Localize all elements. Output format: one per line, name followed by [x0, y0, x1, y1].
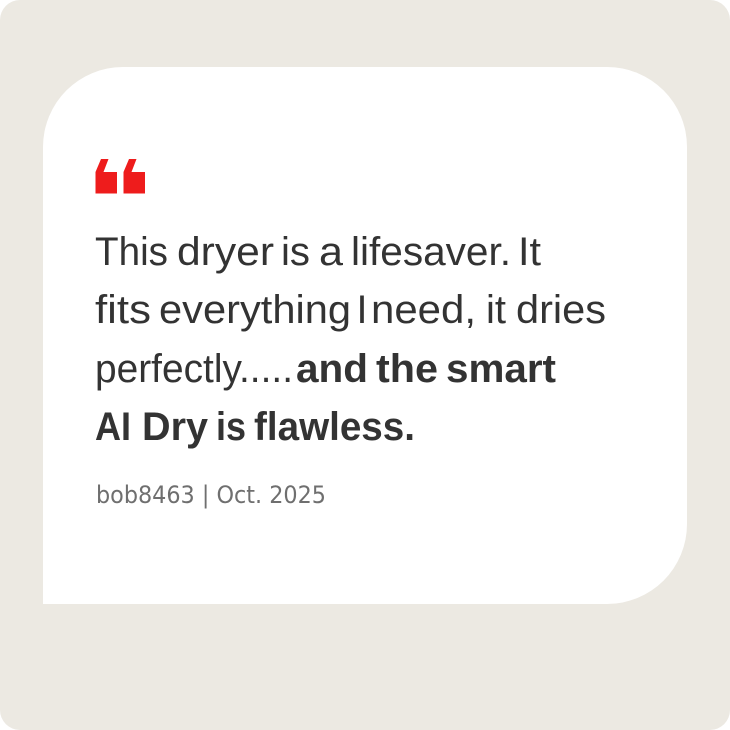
icon: red quotation mark	[96, 159, 145, 194]
text block: review quote: Dry	[142, 405, 209, 449]
text block: review quote: AI	[95, 405, 131, 449]
text block: review quote: lifesaver.	[351, 230, 511, 274]
text block: review quote: smart	[446, 347, 556, 391]
text block: review quote: dries	[516, 288, 606, 332]
text block: review quote: a	[319, 230, 344, 274]
text block: review quote: everything	[159, 288, 351, 332]
text block: review quote: It	[518, 230, 541, 274]
text: review author and date: bob8463 | Oct. 2025	[96, 481, 326, 509]
text block: review quote: This	[95, 230, 168, 274]
text block: review quote: is	[281, 230, 310, 274]
text block: review quote: and	[296, 347, 368, 391]
text block: review quote: I	[356, 288, 368, 332]
text block: review quote: the	[376, 347, 438, 391]
text block: review quote: perfectly.....	[95, 347, 293, 391]
text block: review quote: it	[486, 288, 506, 332]
text block: review quote: dryer	[177, 230, 274, 274]
text block: review quote: fits	[95, 288, 151, 332]
text block: review quote: is	[216, 405, 246, 449]
text block: review quote: flawless.	[254, 405, 415, 449]
panel: white quote card	[43, 67, 687, 604]
text block: review quote: need,	[371, 288, 476, 332]
text block: review quote	[95, 230, 606, 449]
